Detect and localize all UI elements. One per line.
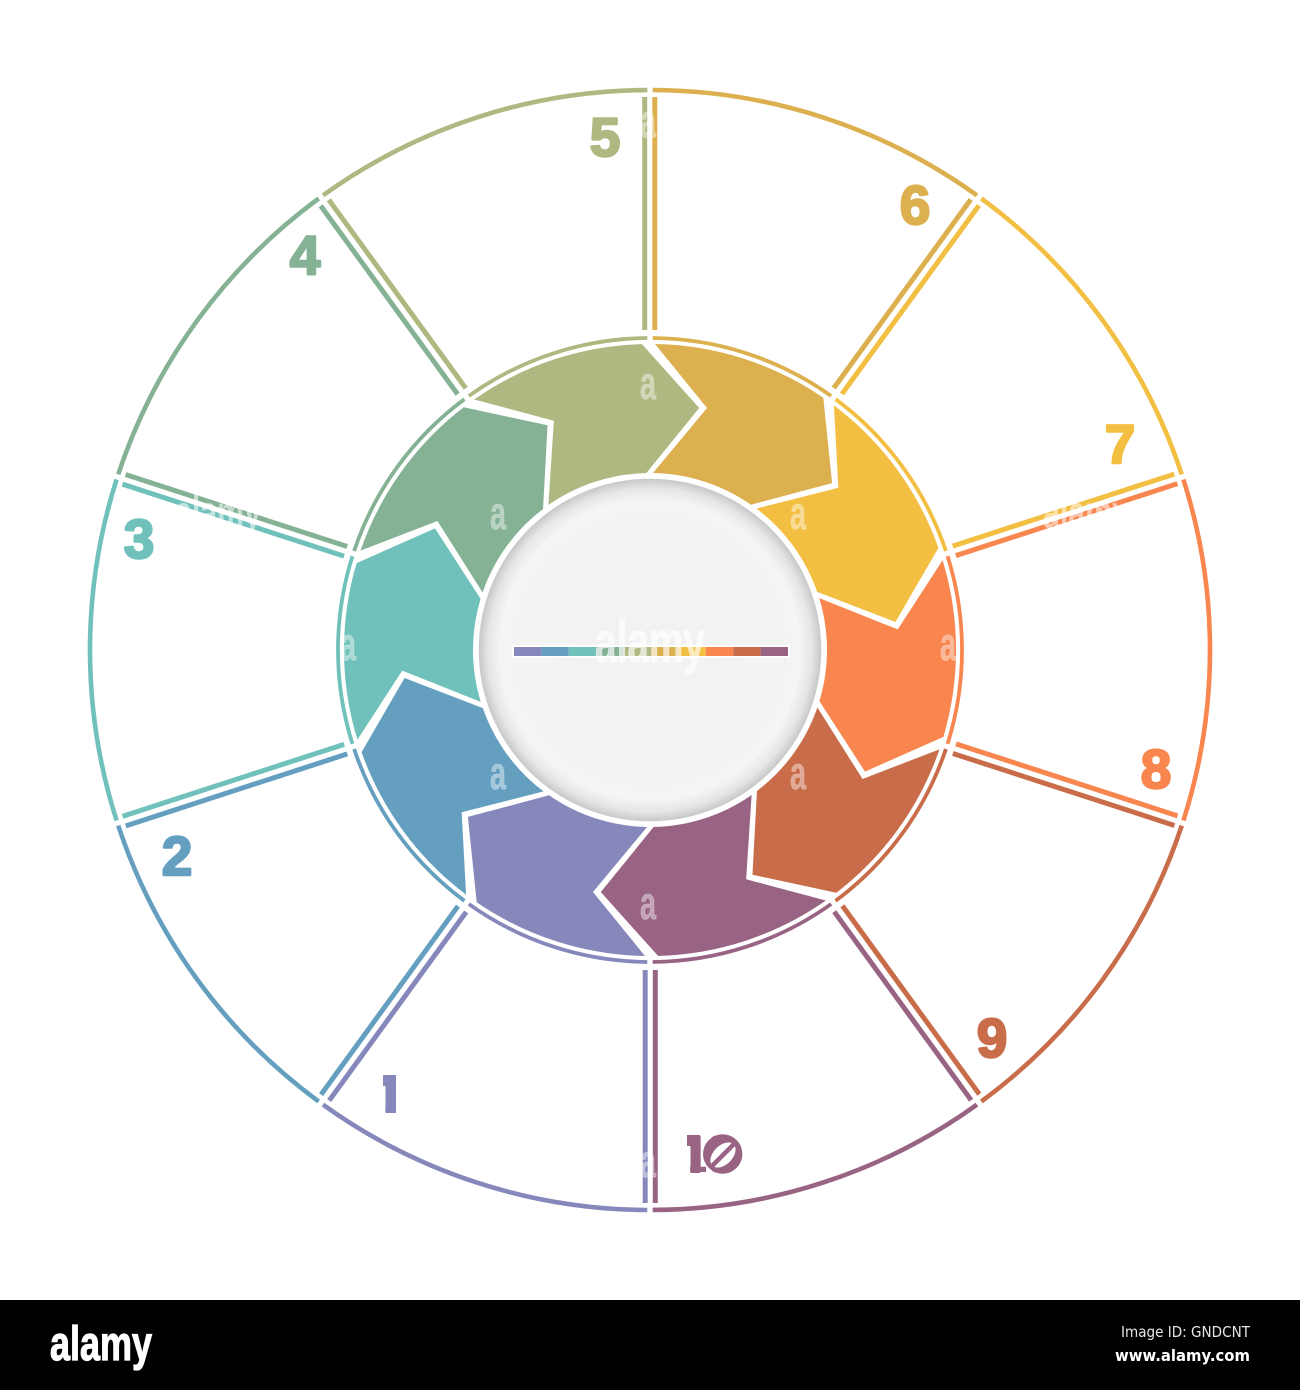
number 1 — [383, 1066, 396, 1124]
segment 1 — [323, 795, 647, 1210]
watermark: small letters: a — [640, 877, 656, 929]
segment 8 — [789, 480, 1284, 916]
watermark: spoke overlays: alamy — [1043, 486, 1129, 538]
watermark: small letters: a — [340, 618, 356, 670]
number 8: 8 — [1141, 738, 1171, 800]
segment 10 — [471, 769, 977, 1295]
number 2: 2 — [162, 825, 192, 887]
footer image id: Image ID: GNDCNT — [1121, 1323, 1251, 1341]
footer url: www.alamy.com — [1115, 1346, 1250, 1365]
central multicolour bar — [512, 645, 790, 658]
watermark: small letters: a — [490, 487, 506, 539]
watermark: small letters: a — [640, 95, 656, 147]
segment 7 — [738, 199, 1244, 725]
segment 6 — [653, 90, 977, 505]
segment 2 — [56, 575, 562, 1101]
number 6: 6 — [900, 174, 930, 236]
watermark: spoke overlays — [175, 486, 1129, 538]
number 5: 5 — [590, 106, 620, 168]
watermark: small letters: a — [640, 357, 656, 409]
segment 9 — [687, 697, 1182, 1134]
watermark: center: alamy — [595, 610, 705, 675]
watermark: small letters: a — [790, 747, 806, 799]
watermark: small letters: a — [940, 618, 956, 670]
watermark: small letters: a — [490, 747, 506, 799]
segment 5 — [323, 5, 829, 531]
number 10: 10 — [688, 1126, 726, 1184]
segment 3 — [16, 384, 511, 820]
watermark: spoke overlays: alamy — [175, 486, 261, 538]
number 7: 7 — [1105, 413, 1135, 475]
number 3: 3 — [124, 508, 154, 570]
number 9: 9 — [977, 1007, 1007, 1069]
number 4: 4 — [290, 224, 321, 286]
watermark: small letters — [340, 95, 956, 1187]
watermark: small letters: a — [790, 487, 806, 539]
footer logo: alamy — [50, 1318, 152, 1371]
segment 4 — [118, 166, 613, 603]
watermark: small letters: a — [640, 1135, 656, 1187]
central disc — [476, 476, 824, 824]
text: 1 — [384, 1066, 396, 1124]
footer bar — [0, 1300, 1300, 1390]
